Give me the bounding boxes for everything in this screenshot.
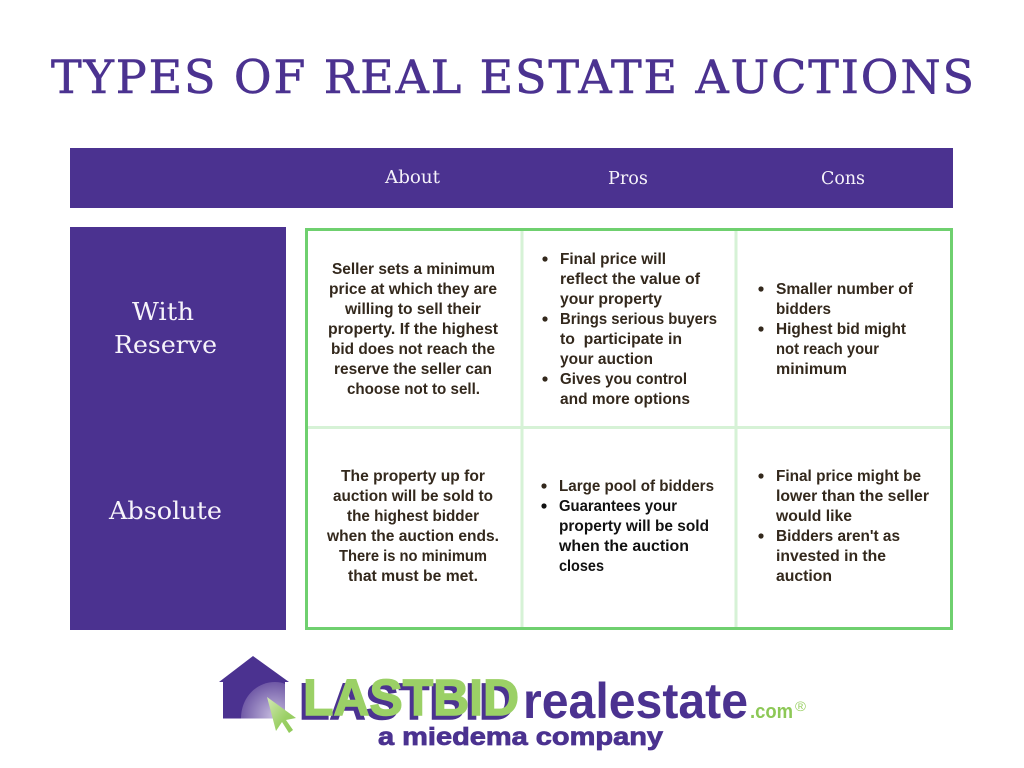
cell: with reserve cons: Highest bid might <box>776 321 906 338</box>
row label: with reserve: Reserve <box>114 331 217 359</box>
logo tagline: a miedema company <box>378 723 663 751</box>
cell: absolute about: The property up for <box>341 468 485 485</box>
cell: with reserve cons: bidders <box>776 301 831 318</box>
cell: with reserve cons: not reach your <box>776 341 879 358</box>
cell: with reserve about: choose not to sell. <box>347 381 480 398</box>
cell: absolute about: the highest bidder <box>347 508 479 525</box>
logo wordmark: .com: .com <box>750 701 793 723</box>
cell: with reserve about: bid does not reach the <box>331 341 495 358</box>
cell: absolute cons <box>758 468 929 585</box>
column heading: pros: Pros <box>608 169 648 189</box>
cell: absolute about: when the auction ends. <box>326 528 499 545</box>
cell: absolute pros: property will be sold <box>559 518 709 535</box>
cell: absolute about: auction will be sold to <box>333 488 493 505</box>
header bar <box>70 148 953 208</box>
cell: with reserve about: Seller sets a minimum <box>332 261 495 278</box>
icon: house with cursor <box>219 656 296 733</box>
cell: absolute cons: lower than the seller <box>776 488 929 505</box>
comparison table grid <box>306 230 952 628</box>
cell: with reserve pros: and more options <box>560 391 690 408</box>
cell: with reserve cons: minimum <box>776 361 847 378</box>
cell: absolute cons: would like <box>775 508 852 525</box>
cell: with reserve pros: your auction <box>560 351 653 368</box>
column heading: cons: Cons <box>821 169 865 189</box>
cell: with reserve pros: to participate in <box>560 331 682 348</box>
logo <box>219 656 807 751</box>
cell: absolute cons: Final price might be <box>776 468 921 485</box>
cell: absolute pros: when the auction <box>558 538 689 555</box>
row label: absolute: Absolute <box>108 497 222 525</box>
logo wordmark: lastbid: LASTBID <box>303 669 519 726</box>
cell: absolute about: that must be met. <box>348 568 478 585</box>
cell: absolute cons: Bidders aren't as <box>776 528 900 545</box>
cell: with reserve about: price at which they are <box>329 281 497 298</box>
cell: absolute cons: auction <box>776 568 832 585</box>
cell: with reserve cons <box>758 281 914 378</box>
cell: absolute about: There is no minimum <box>339 548 487 565</box>
cell: with reserve pros: reflect the value of <box>560 271 701 288</box>
cell: with reserve pros: Gives you control <box>560 371 687 388</box>
cell: with reserve about: property. If the highest <box>328 321 498 338</box>
cell: with reserve about: willing to sell their <box>344 301 481 318</box>
cell: absolute cons: invested in the <box>776 548 886 565</box>
cell: absolute pros: closes <box>559 558 604 575</box>
cell: with reserve pros: Final price will <box>560 251 666 268</box>
cell: with reserve about: reserve the seller can <box>334 361 492 378</box>
cell: absolute pros: Guarantees your <box>559 498 677 515</box>
row label: with reserve <box>114 298 217 359</box>
cell: absolute pros <box>541 478 714 575</box>
row label: with reserve: With <box>132 298 194 326</box>
cell: absolute pros: Large pool of bidders <box>559 478 714 495</box>
cell: with reserve pros <box>542 251 717 408</box>
cell: absolute about <box>326 468 499 585</box>
logo wordmark: realestate: realestate <box>523 673 748 729</box>
cell: with reserve cons: Smaller number of <box>776 281 914 298</box>
cell: with reserve about <box>328 261 498 398</box>
column heading: about: About <box>384 168 440 188</box>
cell: with reserve pros: Brings serious buyers <box>560 311 717 328</box>
cell: with reserve pros: your property <box>560 291 662 308</box>
logo registered mark: ® <box>795 698 807 714</box>
row labels panel <box>70 227 286 630</box>
logo wordmark: lastbid: LASTBID <box>299 673 515 730</box>
title: TYPES OF REAL ESTATE AUCTIONS <box>51 50 974 104</box>
